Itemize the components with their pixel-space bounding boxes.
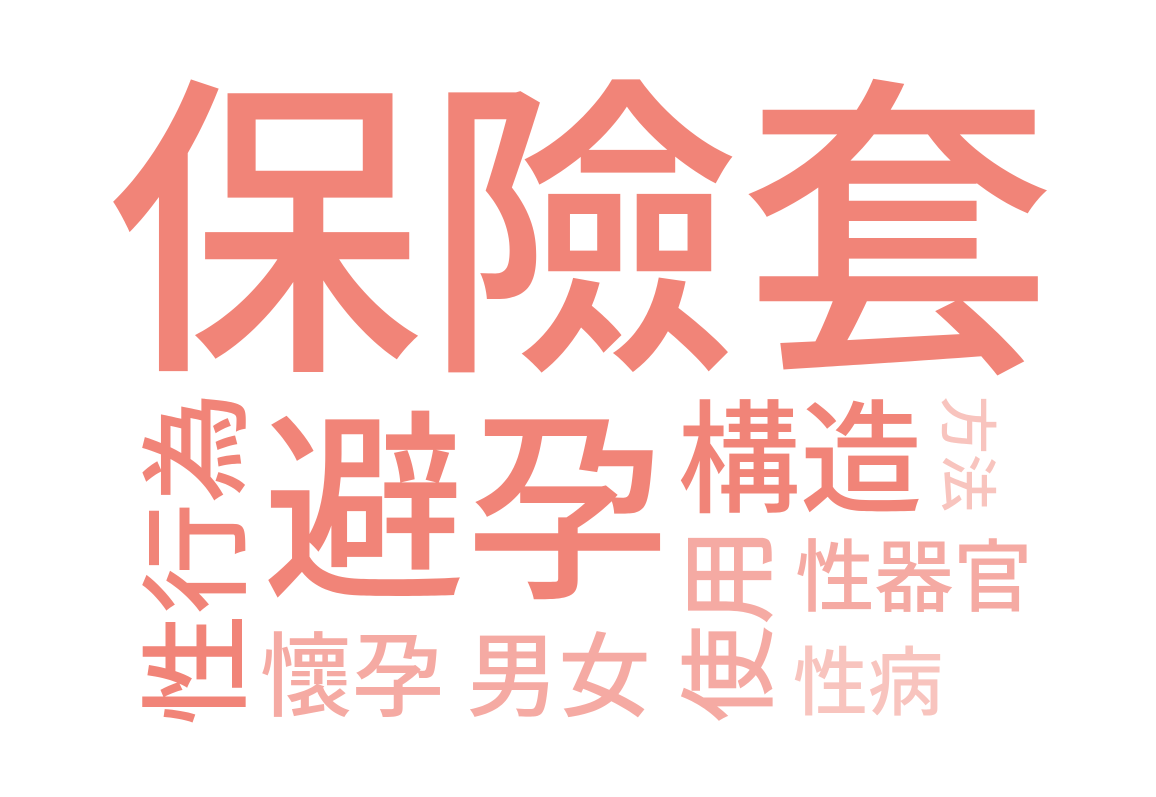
word: 男女: 男女 <box>466 627 651 729</box>
word: 使用 (rotated): 使用 <box>676 527 785 722</box>
word: 性病: 性病 <box>793 641 943 725</box>
word: 性器官: 性器官 <box>796 533 1032 622</box>
word: 構造: 構造 <box>678 392 922 529</box>
word: 保險套: 保險套 <box>106 60 1056 412</box>
word: 方法 (rotated): 方法 <box>934 396 999 512</box>
word: 避孕: 避孕 <box>263 399 669 626</box>
word: 懷孕: 懷孕 <box>260 627 444 729</box>
word: 性行為 (rotated): 性行為 <box>136 392 260 725</box>
